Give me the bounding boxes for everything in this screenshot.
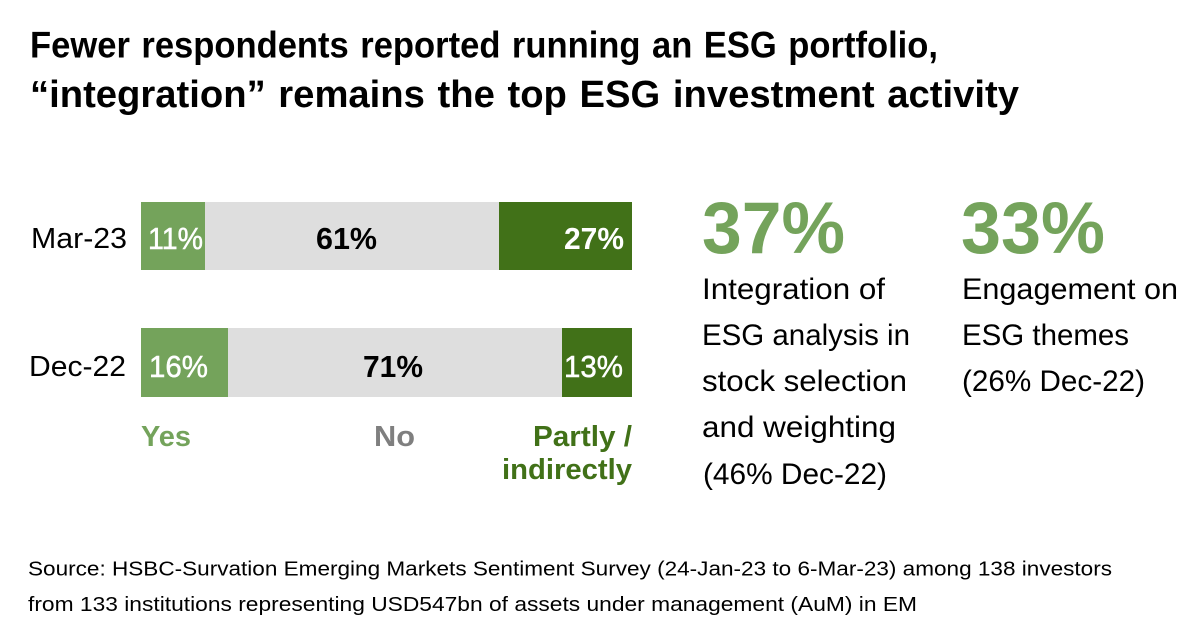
stat: engagement 33% [961, 188, 1178, 398]
legend: No [374, 421, 415, 453]
legend: Partly / [533, 421, 632, 453]
row: Mar-23: 11% [148, 221, 203, 256]
stat: integration 37%: and weighting [702, 411, 896, 444]
legend [141, 421, 632, 486]
stat: engagement 33%: (26% Dec-22) [962, 365, 1145, 398]
stat: integration 37%: 37% [702, 188, 845, 269]
stat: integration 37%: (46% Dec-22) [703, 458, 887, 491]
row: Mar-23: 61% [316, 221, 377, 256]
source note: from 133 institutions representing USD547bn of assets under management (AuM) in EM [28, 593, 917, 616]
row: Dec-22: Dec-22 [29, 351, 126, 383]
legend: Yes [141, 421, 191, 453]
bar chart [29, 202, 632, 397]
row: Dec-22: 16% [149, 349, 208, 384]
stat: engagement 33%: ESG themes [962, 319, 1129, 352]
stat: integration 37%: ESG analysis in [702, 319, 910, 352]
source note: Source: HSBC-Survation Emerging Markets Sentiment Survey (24-Jan-23 to 6-Mar-23) among 138 investors [28, 558, 1112, 580]
row: Mar-23: Mar-23 [31, 223, 127, 255]
stat: integration 37% [702, 188, 910, 491]
stat: integration 37%: stock selection [702, 365, 907, 398]
legend: indirectly [502, 454, 632, 486]
title: Fewer respondents reported running an ESG portfolio, [30, 24, 938, 66]
stat: integration 37%: Integration of [702, 273, 886, 306]
source note [28, 558, 1112, 616]
row: Mar-23: 27% [564, 221, 624, 256]
stat: engagement 33%: 33% [961, 188, 1105, 269]
row: Mar-23 [31, 202, 632, 270]
row: Dec-22: 71% [363, 349, 423, 384]
row: Dec-22 [29, 328, 632, 397]
row: Dec-22: 13% [564, 349, 623, 384]
stat: engagement 33%: Engagement on [962, 273, 1178, 306]
title: “integration” remains the top ESG investment activity [30, 74, 1019, 116]
title [30, 24, 1019, 116]
